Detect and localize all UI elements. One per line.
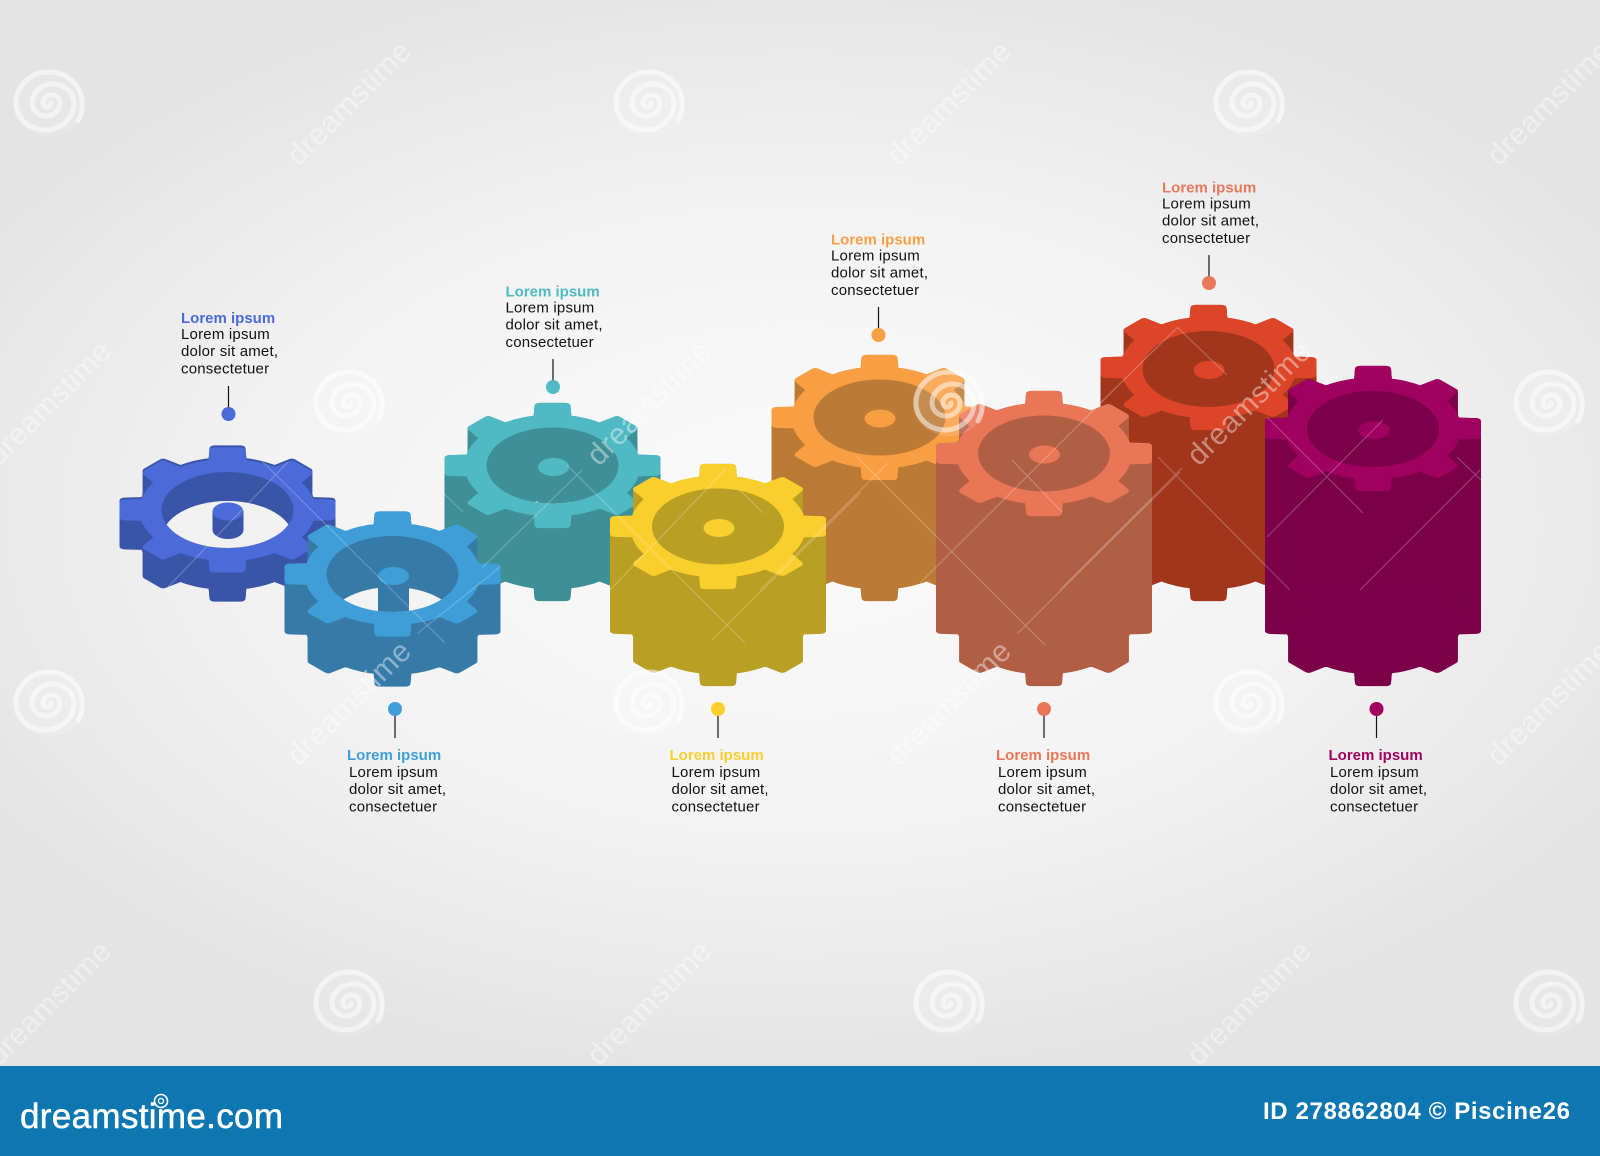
gear 2 top face xyxy=(290,514,496,634)
gear 4 hub xyxy=(704,519,734,537)
marker 1 xyxy=(222,386,236,421)
label 3: dolor sit amet, xyxy=(506,316,603,334)
label 4 xyxy=(670,747,769,816)
watermark lines xyxy=(168,327,1481,645)
gear 6 salmon xyxy=(941,394,1147,683)
gear 5 top face xyxy=(776,358,982,477)
label 6: Lorem ipsum xyxy=(996,747,1090,764)
label 5: Lorem ipsum xyxy=(831,232,925,248)
gear 8 hole xyxy=(1307,391,1439,467)
gear 4 hole xyxy=(652,488,784,564)
watermark text: dreamstime xyxy=(580,934,718,1072)
label 6 xyxy=(996,747,1095,816)
label 7: dolor sit amet, xyxy=(1162,212,1259,230)
label 4: consectetuer xyxy=(672,798,760,816)
gear 2 hole xyxy=(326,536,458,612)
label 5: Lorem ipsum xyxy=(831,248,920,264)
label 1: consectetuer xyxy=(181,360,269,378)
marker 3 xyxy=(546,359,560,394)
image id and credit: ID 278862804 © Piscine26 xyxy=(1263,1098,1570,1125)
gear 4 yellow xyxy=(615,467,821,683)
label 2: dolor sit amet, xyxy=(349,781,446,798)
label 8 xyxy=(1328,747,1427,816)
label 8: consectetuer xyxy=(1330,798,1418,816)
watermark text: dreamstime xyxy=(880,34,1018,172)
gear 7 hole xyxy=(1142,331,1274,407)
label 3 xyxy=(506,284,603,351)
label 2: Lorem ipsum xyxy=(347,747,441,764)
gear 3 teal xyxy=(450,406,656,598)
gear 5 extruded side xyxy=(776,358,982,598)
gear 5 orange xyxy=(776,358,982,598)
marker 7 xyxy=(1202,255,1216,290)
gear 1 hub xyxy=(212,502,244,520)
label 6: dolor sit amet, xyxy=(998,781,1095,798)
marker 6 xyxy=(1037,702,1051,738)
gear 3 hole xyxy=(486,428,618,504)
label 5 xyxy=(831,232,928,299)
marker 2 xyxy=(388,702,402,738)
label 7: Lorem ipsum xyxy=(1162,180,1256,196)
label 2: Lorem ipsum xyxy=(349,764,438,781)
label 1: Lorem ipsum xyxy=(181,326,270,343)
gear 2 hub xyxy=(378,567,409,585)
gear 4 extruded side xyxy=(615,467,821,683)
label 2 xyxy=(347,747,446,816)
watermark text: dreamstime xyxy=(880,634,1018,772)
gear 2 light blue xyxy=(290,514,496,684)
label 7: consectetuer xyxy=(1162,230,1250,247)
gear 7 extruded side xyxy=(1106,308,1312,598)
watermark text: dreamstime xyxy=(1180,934,1318,1072)
gear 2 extruded side xyxy=(290,514,496,684)
gear 6 hub xyxy=(1029,446,1060,464)
gear 8 hub xyxy=(1358,421,1390,439)
gear 8 top face xyxy=(1270,369,1476,488)
watermark text: dreamstime xyxy=(280,34,418,172)
marker 8 xyxy=(1370,702,1384,738)
gear 1 hole xyxy=(162,472,294,548)
label 2: consectetuer xyxy=(349,798,437,816)
label 5: consectetuer xyxy=(831,282,919,299)
gear 8 extruded side xyxy=(1270,369,1476,683)
gear 7 red xyxy=(1106,308,1312,598)
label 3: consectetuer xyxy=(506,334,594,351)
label 7: Lorem ipsum xyxy=(1162,196,1251,212)
gear 6 extruded side xyxy=(941,394,1147,683)
label 8: dolor sit amet, xyxy=(1330,781,1427,798)
gear 8 purple xyxy=(1270,369,1476,683)
label 8: Lorem ipsum xyxy=(1330,764,1419,781)
watermark text: dreamstime xyxy=(1180,334,1318,472)
label 1: dolor sit amet, xyxy=(181,343,278,360)
marker 4 xyxy=(711,702,725,738)
gear 4 top face xyxy=(615,467,821,586)
gear 1 extruded side xyxy=(124,448,330,599)
footer bar xyxy=(0,1066,1600,1156)
label 4: Lorem ipsum xyxy=(672,764,760,781)
label 1: Lorem ipsum xyxy=(181,310,275,327)
gear 6 top face xyxy=(941,394,1147,513)
label 6: Lorem ipsum xyxy=(998,764,1087,781)
gear 7 top face xyxy=(1106,308,1312,427)
footer logo: dreamstime.com xyxy=(20,1097,283,1136)
gear 5 hub xyxy=(864,410,896,428)
marker 5 xyxy=(872,307,886,342)
label 1 xyxy=(181,310,278,378)
gear 7 hub xyxy=(1194,361,1224,379)
gear 3 extruded side xyxy=(450,406,656,598)
label 4: dolor sit amet, xyxy=(672,781,769,798)
gear 5 hole xyxy=(814,380,946,456)
gear 1 blue xyxy=(124,448,330,599)
watermark text: dreamstime xyxy=(580,334,718,472)
label 3: Lorem ipsum xyxy=(506,300,594,316)
label 6: consectetuer xyxy=(998,798,1086,816)
gear 3 top face xyxy=(450,406,656,525)
label 4: Lorem ipsum xyxy=(670,747,764,764)
label 8: Lorem ipsum xyxy=(1328,747,1423,764)
watermark text: dreamstime xyxy=(280,634,418,772)
gear 6 hole xyxy=(978,416,1110,492)
label 5: dolor sit amet, xyxy=(831,264,928,282)
gear 1 top face xyxy=(124,450,330,570)
label 3: Lorem ipsum xyxy=(506,284,600,300)
gear 3 hub xyxy=(538,458,569,476)
label 7 xyxy=(1162,180,1259,247)
